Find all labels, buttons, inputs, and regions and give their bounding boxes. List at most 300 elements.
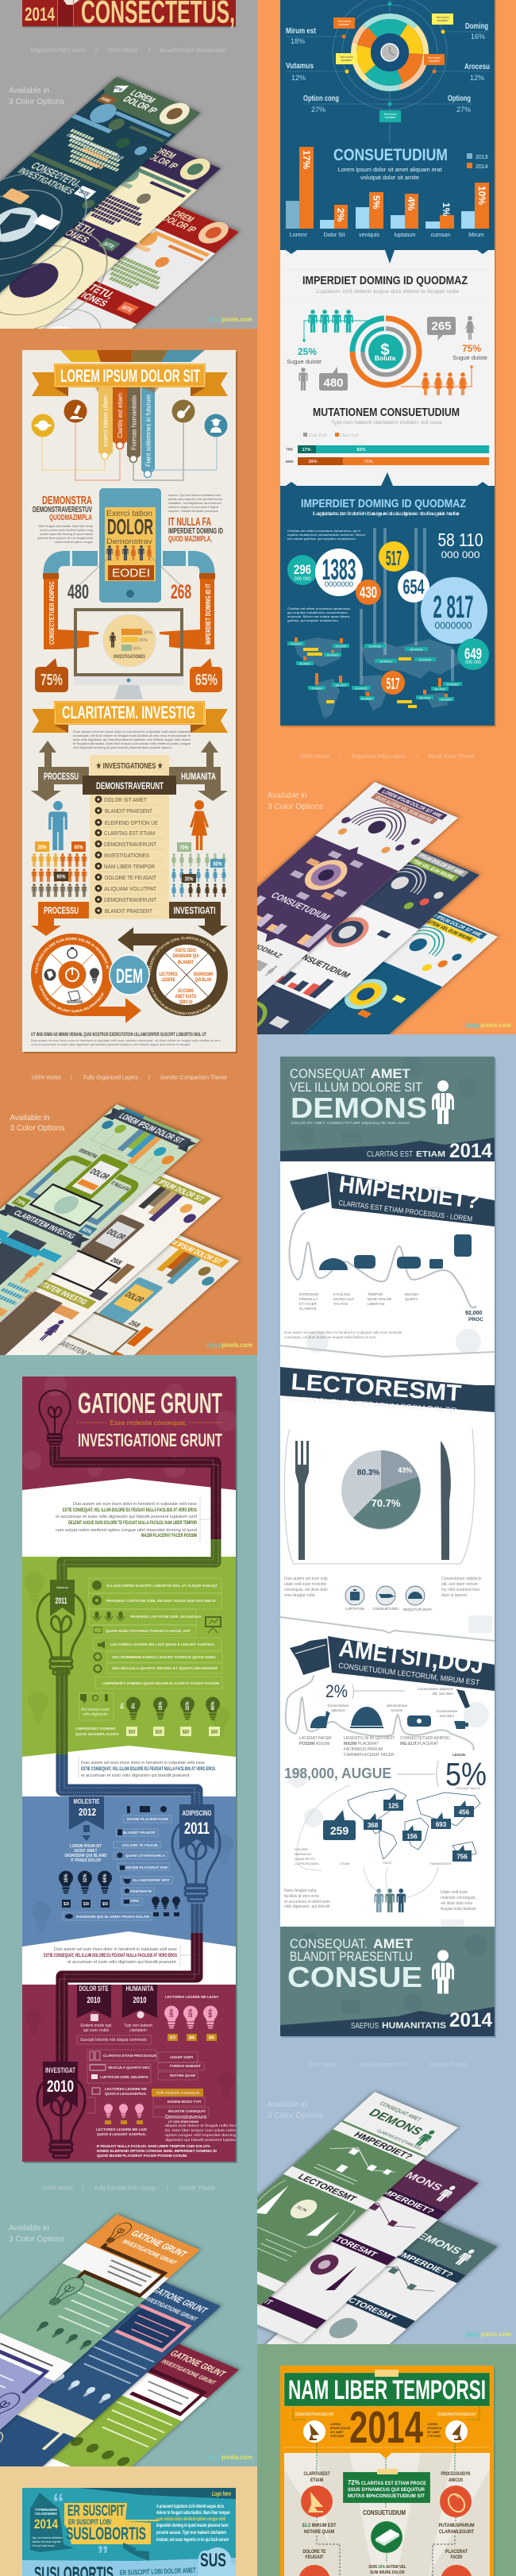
heading: mutationem	[313, 406, 460, 425]
box: accumsan: odio dignissim	[83, 1712, 108, 1717]
sheet: green version: 70.7%	[295, 2205, 308, 2213]
list: maroon rows: LUPTATUM ZZRIL DELENITA	[100, 2075, 148, 2080]
tagline: Esse molestie consequat,	[110, 1419, 187, 1427]
paragraph 1: cum soluta nobis eleifend option congue nihil imperdiet doming id quod	[56, 1528, 197, 1533]
sheet: red version	[43, 204, 241, 329]
faint kitchen motifs	[288, 1057, 492, 1927]
bubble stats: 296	[294, 562, 311, 577]
sheet: green version: DEMONS	[365, 2107, 426, 2138]
box: accumsan: Accumsan iusto	[81, 1708, 110, 1712]
list column: BLANDIT PRAESENT	[105, 807, 152, 814]
right dish label: DEMONSTRAVERUNT	[437, 2412, 477, 2417]
chart: green bulbs: $20	[183, 1731, 190, 1735]
logo: zippypixels: zippypixels.com	[465, 2331, 511, 2338]
orbit labels: Vutamus	[286, 62, 314, 71]
small labels: POSSIM ASSUM	[299, 1742, 329, 1746]
band: ametsit	[290, 1635, 495, 1691]
caption: features light orange	[299, 754, 475, 760]
paragraph: dolore te feugait nulla facilisi. Nam liber tempor	[156, 2510, 230, 2516]
section: green bulb and ribbon	[37, 1580, 85, 1674]
caption: available colours light orange: 3 Color Options	[268, 802, 323, 811]
map markers: 90,00000	[441, 698, 452, 701]
list column: CLARITAS EST ETIAM	[104, 830, 155, 837]
sheet: mint version: LOREM IPSUM DOLOR SIT	[117, 1112, 187, 1146]
paragraph 2: Duis autem vel eum iriure dolor in hendrerit in vulputate velit esse	[81, 1761, 205, 1765]
paragraph 3	[44, 1947, 177, 1965]
sheet: green version: CLARITAS EST ETIAM 2014	[375, 2129, 422, 2151]
year: 2014	[349, 2402, 423, 2453]
tags: clariatem	[341, 59, 352, 62]
section: kitchen footer: CONSEQUAT.	[290, 1936, 368, 1951]
stacked bars: 83%	[356, 448, 366, 452]
paragraph: insitam; est usus legentis in iis qui facit eorum	[156, 2537, 229, 2543]
stacked bars: Uius Yud	[341, 433, 358, 438]
monitor chart: 80%	[144, 630, 152, 635]
band: lectoresmt: LECTORESMT	[291, 1369, 463, 1407]
bar chart: 2%	[335, 208, 346, 222]
top fold stripes	[60, 350, 205, 362]
caption: features teal: /	[167, 2186, 168, 2191]
list: maroon rows: QUOO II LEGUSAEPIUS.	[105, 2092, 147, 2097]
text: 75%: Sugue duiste	[452, 354, 487, 361]
text block: it nulla fa: IMPERDIET DOMING ID	[168, 527, 223, 536]
lines and labels below the map: LUTPATEUISMO-	[295, 1862, 321, 1866]
sheet: orange green version: GATIONE GRUNT	[129, 2229, 190, 2259]
circle: DEM: DEM	[116, 965, 143, 988]
chart: pink bulbs: LECTORES LEGERE ME LIUSIT.	[165, 1995, 219, 2000]
column labels: FACER	[451, 2555, 463, 2560]
pictogram: right people grid	[171, 842, 226, 897]
arrow: investigati: INVESTIGATI	[173, 905, 216, 916]
orbit labels: 27%	[456, 106, 471, 114]
cycle: dark: LEGERE	[162, 978, 175, 983]
section: kitchen header: AMET	[371, 1066, 411, 1081]
world map	[294, 637, 460, 718]
paragraphs: dunt ut laoreet.	[441, 1593, 468, 1598]
text block: demonstra: nobis eleifend option congue	[55, 541, 93, 544]
illustration: fork knife and plate: 80.3%	[357, 1469, 379, 1477]
quote marks	[54, 2494, 107, 2553]
caption: features blue	[307, 2062, 467, 2068]
bubble stats: 1383	[322, 553, 356, 586]
bar chart	[286, 147, 489, 238]
paragraphs: Duis autem vel eum vulp	[284, 1577, 328, 1581]
ribbon: molestie: 2012	[79, 1806, 96, 1818]
faint bulbs watermark	[24, 1572, 234, 2098]
paragraphs: qui sequitur mutationem consuetudium	[287, 610, 348, 614]
chart: pink bulbs: $70	[170, 2035, 175, 2040]
left dish label: CTETUER	[330, 2435, 344, 2438]
right dish label: CTETUER	[427, 2435, 441, 2438]
chart: blue bulbs: 64%	[102, 1873, 108, 1883]
lines and labels below the map: feugiat nulla,facilisis	[441, 1907, 476, 1912]
panel: growth infographic: 15% SEACULA QUARTA DECIMA ET QUINTA DECIMADOR	[112, 1666, 218, 1670]
sheet: mint version: DOLOR	[87, 1167, 112, 1181]
paragraph: te feugait nulla facilisi. Nam liber tempor cum soluta nobis eleifend option congue	[73, 742, 191, 745]
pale columns	[360, 528, 454, 685]
callout: right pointing hand	[160, 573, 215, 649]
map markers: 361,0000	[335, 683, 346, 687]
caption: features orange: /	[148, 1075, 150, 1081]
caption: available colours orange	[10, 1113, 65, 1133]
chart: mini pink bulbs: LECTORES LEGERE ME LIUS	[96, 2127, 148, 2132]
sheet: purple version: HMPERDIET?	[373, 2185, 436, 2216]
tags: Text eorum	[428, 56, 441, 60]
ribbon: humanita: Typi non habent	[124, 2023, 152, 2028]
column labels: ETIAM	[310, 2478, 323, 2483]
cycle: dark: BLANDIT	[178, 961, 194, 965]
heading and green book icon: EUM IRIURE DOLOR	[370, 2570, 405, 2575]
paragraph: nihil imperdiet doming id quod mazim placerat facer possim assum.	[73, 746, 172, 749]
bar chart: luptatum	[395, 233, 416, 238]
chart: mini pink bulbs: QUOO II LEGUNT SAEPIUS.	[97, 2132, 146, 2137]
squiggle with kitchen icons: TACITAS	[333, 1302, 348, 1306]
cycle: dark: ODIO DI	[179, 1000, 193, 1005]
text block: demonstra: Nete feugait nulla facilisi. Nam liber temp	[38, 525, 93, 528]
small labels: FACIPAMUS PARIUM	[344, 1747, 383, 1752]
bar chart: veniquis	[359, 233, 379, 238]
stat: 198,000 augue: 198,000, AUGUE	[284, 1765, 391, 1781]
stat: 5%: FEUGIAT NULLA	[456, 1786, 480, 1790]
bubble 480: 480	[323, 376, 344, 390]
chart: pink bulbs	[164, 1995, 219, 2041]
caption: features grey	[31, 48, 226, 54]
heading: consuetudium: Lorem ipsum dolor sit amet aliquam erat	[338, 167, 442, 173]
band: hmperdiet: CLARITAS EST ETIAM PROCESSUS · LOREM	[338, 1199, 473, 1223]
paragraph: possim assum. Typi non habent claritatem	[156, 2530, 226, 2536]
squiggle with kitchen icons: PROC	[468, 1317, 483, 1323]
sheet: purple version: CONSUETUDIUM	[268, 891, 333, 922]
chart: green bulbs: 16%	[158, 1701, 164, 1710]
stat: 2%	[325, 1681, 453, 1701]
bar chart: 17%	[301, 150, 312, 169]
sheet: cream version: CTETU,	[62, 216, 99, 237]
list column: INVESTIGATIONES	[104, 852, 149, 859]
ribbon: humanita: 2010	[133, 1996, 146, 2005]
stacked bars: 17%	[302, 448, 311, 452]
ribbon: humanita: HUMANITA	[125, 1985, 154, 1993]
sheet: red version: CTETU,	[80, 279, 117, 301]
tags: clariatem	[339, 23, 350, 26]
bar chart: Dolor Sit	[324, 233, 345, 238]
icons: cookware circles	[345, 1586, 432, 1611]
small labels: demonstrave	[387, 1704, 408, 1708]
list: blue rows: MAZIM PLACERAT FER	[126, 1866, 168, 1870]
list column: DEMONSTRAVERUNT	[104, 896, 156, 903]
sheet: purple version: DEMONS	[387, 2163, 445, 2193]
sheet: white purple version: LOREM IPSUM DOLOR SIT	[137, 1170, 206, 1203]
stat: 2%: Consectetuer adipiscin	[417, 1687, 453, 1691]
paragraph: consequat, vel illum dolore eu feugiat nulla facilisis at vero	[284, 1335, 376, 1339]
section: kitchen footer: AMET	[373, 1936, 414, 1951]
list: maroon rows: option congue nihil imperdiet doming	[165, 2133, 237, 2137]
sheet: navy version: LOREM IPSUM DOLOR SIT AME	[402, 846, 465, 876]
text block: it nulla fa: saepius. Claritas est etiam processus	[168, 510, 218, 513]
map markers	[287, 637, 462, 708]
sheet: dark teal version: LOREM	[128, 88, 158, 106]
paragraph 1	[56, 1502, 197, 1538]
panel: growth infographic	[22, 1374, 237, 2163]
sheet: teal version: LECTORESMT	[335, 2292, 398, 2323]
caption: features teal: Growth Theme	[179, 2186, 215, 2191]
sheet: mint version: 75%	[13, 1197, 29, 1207]
paragraph: Duis autem vel eum iriure dolor in hendrerit in vulputate velit esse molestie	[284, 1330, 402, 1334]
list: blue rows: DOLORE TE FEUGIE	[122, 1843, 159, 1848]
text block: lorem ipsum sit	[65, 1844, 107, 1863]
speech 65%	[190, 658, 222, 692]
cycle: orange	[31, 934, 141, 1023]
sheet: teal blue version	[302, 909, 500, 1034]
sheet: orange version: CLARITATEM INVESTIG	[51, 1338, 112, 1367]
stat: 2%: elit, sed diam	[432, 1692, 453, 1696]
bar chart: 2013	[476, 155, 488, 160]
caption: features teal: /	[82, 2186, 83, 2191]
paragraph: iusto odio dignissim qui blandit praesent luptatum zzril delenit augue duis dolore	[73, 738, 191, 741]
squiggle with kitchen icons	[290, 1212, 483, 1323]
numbers 480 and 268: 480	[67, 581, 89, 603]
squiggle with kitchen icons: MAGNA AUT	[333, 1297, 355, 1301]
caption: available colours grey: Available in	[9, 86, 49, 95]
chart: blue bulbs: $30	[83, 1902, 89, 1907]
caption: features light orange: 100% Vector	[299, 754, 330, 760]
map markers: 29,000182	[368, 645, 381, 648]
caption: features teal	[42, 2186, 215, 2191]
bubble stats: 517	[386, 546, 402, 570]
pipe	[52, 1446, 218, 2064]
ribbon: molestie: MOLESTIE	[73, 1797, 100, 1805]
box: accumsan: QUOD MAZIMPLACERA	[75, 1732, 120, 1736]
dashed connectors	[317, 2443, 456, 2563]
sheet: dark teal version: AME	[98, 96, 112, 104]
sheet: purple version: AMETSIT	[241, 2289, 275, 2307]
orbit labels: 27%	[311, 106, 325, 114]
sheet: cream version: DOLOR IP	[141, 150, 181, 171]
mockups: world stats colour options	[0, 75, 241, 329]
right dish label: SIT AMET	[427, 2431, 441, 2434]
monitor chart: 65%	[139, 638, 148, 643]
pictogram: three men	[375, 1889, 406, 1912]
sheet: mint version: DEMONSTRA	[77, 1148, 98, 1160]
total 58 110: 000 000	[441, 549, 480, 560]
map markers: 361,0000	[434, 687, 445, 691]
small labels: ING ELIT,PLACERAT	[400, 1742, 438, 1746]
list: maroon rows: CLARITAS ETIAM PROCESSUS	[103, 2054, 157, 2058]
stat: 5%: 5%	[445, 1756, 487, 1792]
phone: Exerci tation	[106, 509, 152, 518]
light blue band	[22, 2547, 236, 2576]
list: blue rows: DEMONSTR	[130, 1889, 152, 1894]
ribbon: molestie	[69, 1796, 104, 1841]
paragraph 1: ESTIE CONSEQUAT, VEL ILLUM DOLORE EU FEUGIAT NULLA FACILISIS AT VERO EROS	[63, 1508, 197, 1513]
icons: cookware circles: CONSUETUDIU	[372, 1607, 399, 1611]
cycle: dark: PRAESENT LUPTATUM ZZRIL CLARITAS EST ETIAM	[149, 937, 216, 975]
sheet: green version	[257, 2089, 460, 2307]
panel: kitchen infographic: 456	[459, 1808, 470, 1816]
section: maroon background	[22, 1985, 236, 2162]
heading: imperdiet blue: Luptatum zzril delenit augue duis dolore	[314, 511, 460, 517]
hand shape with year: COLAEDOEMING	[35, 2512, 57, 2516]
sheet: teal blue version: LOREM IPSUM DOLOR SIT AME	[420, 908, 483, 938]
sheet: navy version: CONSUETUDIUM	[289, 949, 352, 980]
orbit labels: 12%	[291, 74, 306, 82]
paragraphs: my nibh euismod tinci	[441, 1588, 479, 1592]
left dish label	[293, 2407, 351, 2443]
column labels: PROCESSUSDYN	[441, 2471, 471, 2477]
lines and labels below the map: molestie consequat,	[441, 1896, 476, 1900]
tags	[333, 13, 453, 122]
circle: DEM	[110, 955, 149, 995]
map markers: 90,00000	[299, 662, 310, 665]
quote marks: “	[52, 2489, 64, 2516]
section: kitchen header: VEL ILLUM DOLORE SIT	[290, 1080, 422, 1095]
list column: ELEIFEND OPTION UE	[105, 819, 158, 826]
sheet: cream version: LOREM	[148, 144, 179, 161]
sheet: teal version: DEMONS	[406, 2227, 464, 2256]
sheet: purple version	[257, 780, 460, 1002]
text block: lorem ipsum sit: DOSIT AMET	[75, 1849, 97, 1854]
caption: features orange: Fully Organized Layers	[83, 1075, 138, 1081]
chart: blue bulbs: $50	[102, 1902, 108, 1907]
caption: features light orange: World Stats Theme	[428, 754, 475, 760]
sheet: cream version: GATIONES	[44, 221, 92, 245]
right dish label	[427, 2407, 479, 2443]
tags: Text eorum	[340, 56, 353, 59]
arrow: humanita	[169, 741, 228, 801]
caption: features light orange: Organized PSD Layers	[352, 754, 406, 760]
hand shape with year: in iis qui facit eorum	[32, 2544, 55, 2547]
mockups: growth colour options	[0, 2214, 239, 2530]
caption: features orange: Gender Comparison Theme	[160, 1075, 227, 1081]
paragraph	[156, 2504, 230, 2543]
bulb and ribbon: adipiscing: ADIPISCING	[183, 1809, 211, 1818]
sheet: cream version	[0, 142, 223, 329]
caption: features teal: Fully Editable PSD Design	[94, 2186, 156, 2191]
sheet: red version: GATIONES	[63, 284, 110, 309]
lines and labels below the map: HUMANITATIS	[430, 1862, 452, 1866]
pictogram: right people grid: 70%	[179, 845, 189, 851]
orbit labels: 18%	[291, 37, 305, 45]
section: kitchen header: ETIAM	[416, 1150, 445, 1159]
heading: imperdiet: Luptatum zzril delenit augue duis dolore te feugait nulla	[316, 289, 459, 295]
callout: left pointing hand	[43, 573, 98, 649]
sheet: green version: HMPERDIET?	[351, 2131, 414, 2162]
total 58 110: 58 110	[438, 529, 483, 550]
bubble stats: 000 000	[465, 660, 482, 665]
bubble stats: 430	[360, 584, 377, 602]
icon: grey woman	[465, 316, 475, 340]
bar chart: 2014	[476, 164, 488, 170]
caption: available colours grey	[9, 86, 64, 106]
column labels: DOLORE TE	[303, 2549, 326, 2555]
tags: clariatem	[385, 116, 396, 119]
sheet: purple version: DUIS AUTEM VEL EUM IRIURE	[374, 795, 434, 823]
lines and labels below the map: MAGNA AU	[295, 1852, 311, 1856]
logo: zippypixels: zippypixels.com	[206, 1342, 252, 1349]
panel: gender comparison infographic	[22, 350, 237, 1053]
list column: DOLORE TE FEUGAIT	[105, 874, 156, 881]
caption: available colours blue: 3 Color Options	[268, 2111, 323, 2120]
list: maroon rows: NOTARE QUAM	[170, 2074, 195, 2077]
pictogram: left people grid	[32, 841, 87, 897]
text block: demonstra: DEMONSTRAVERESTUV	[33, 506, 92, 514]
list: blue rows	[63, 1806, 172, 1920]
small labels: sed diam	[440, 1714, 454, 1718]
panel: world stats infographic	[280, 0, 496, 727]
small labels: MAZIM PLACERAT	[344, 1742, 379, 1746]
arrow: processu orange	[31, 902, 89, 936]
lines and labels below the map: facilisis at vero eros	[284, 1894, 319, 1899]
list column: DEMONSTRAVERUNT	[104, 841, 156, 848]
list: blue rows: MAZIM PLACERFACER	[127, 1817, 169, 1822]
orbit labels: Mirum est	[286, 27, 317, 36]
band: hmperdiet: HMPERDIET?	[337, 1172, 481, 1215]
paragraph	[284, 1330, 402, 1339]
heading: imperdiet	[302, 274, 468, 295]
map markers: 29,000022	[446, 683, 459, 686]
connector lines	[42, 423, 217, 480]
sheet: maroon green version: GATIONE GRUNT	[168, 2349, 229, 2379]
orbit labels: 16%	[471, 33, 485, 40]
paragraphs: elit, sed diam nonum	[441, 1582, 478, 1587]
paragraphs: utate velit esse molestie	[284, 1582, 327, 1587]
mockups: gender colour options	[0, 1102, 241, 1355]
bar chart: cumsan	[431, 233, 450, 238]
bar chart: 1%	[441, 202, 452, 217]
ribbon heading: claritatem	[32, 701, 228, 733]
orbit labels: 12%	[470, 74, 484, 82]
caption: features blue: /	[347, 2062, 348, 2068]
column labels: CLARAMLEGUNT	[439, 2529, 474, 2535]
stacked bars: Duis Pud	[309, 433, 326, 438]
band: lectoresmt: ANTEPONEMT LITERARUM FORM DOLOR	[291, 1395, 458, 1415]
section: green background	[22, 1557, 236, 1757]
icon: red mouse	[440, 2486, 472, 2517]
squiggle with kitchen icons: TEMPOR	[368, 1292, 383, 1296]
section: kitchen header: CONSEQUAT	[290, 1066, 365, 1081]
map bubbles	[323, 1793, 474, 1862]
text block: demonstra: uenihil imperdiet doming id quod mazim	[40, 533, 93, 536]
quote marks: ”	[97, 2542, 109, 2568]
caption: features grey: 100% Vector	[107, 48, 138, 54]
arrow: investigati	[169, 902, 228, 936]
chart: green bulbs: 8%	[120, 1703, 125, 1708]
text block: it nulla fa: Assum. Typi non habent claritatem insit	[168, 494, 221, 497]
chart: pink bulbs: $80	[189, 2035, 194, 2040]
paragraphs: lectorum. Mirum est notare quam littera	[287, 614, 350, 618]
small labels: CIARAMPLACERAT FACER	[344, 1753, 395, 1758]
section: kitchen footer: CONSUE	[287, 1961, 422, 1993]
panel: growth infographic: ULLAMCORPER SUSCIPIT LOBORTIS NISL UT ALIQUIP EXEAQT	[106, 1584, 218, 1588]
list: maroon rows: SEACULA QUARTA DEC	[108, 2066, 150, 2070]
mockups: kitchen colour options	[178, 2092, 498, 2384]
cycle: dark: IUSTO ODIO	[175, 949, 196, 953]
inner panel	[284, 2453, 490, 2576]
paragraph 2	[79, 1757, 215, 1778]
icons: lower red circles	[298, 2565, 472, 2576]
sheet: white purple version: DOLOR	[104, 1228, 128, 1242]
text block: it nulla fa: QUOD MAZIMPLA,	[168, 535, 212, 544]
squiggle with kitchen icons: ET FACER	[299, 1302, 318, 1306]
chart: green bulbs: 8%	[131, 1703, 137, 1708]
closing text	[97, 2144, 218, 2158]
paragraphs: Claritas est etiam processus dynamicus, qui s	[287, 529, 360, 533]
bubble stats: 654	[403, 575, 425, 599]
caption: features blue: 100% Vector	[307, 2062, 338, 2068]
caption: features orange: /	[71, 1075, 72, 1081]
paragraph	[73, 730, 191, 749]
section: kitchen footer: BLANDIT PRAESENTLU	[290, 1949, 413, 1964]
bubble 265: 265	[431, 319, 452, 333]
